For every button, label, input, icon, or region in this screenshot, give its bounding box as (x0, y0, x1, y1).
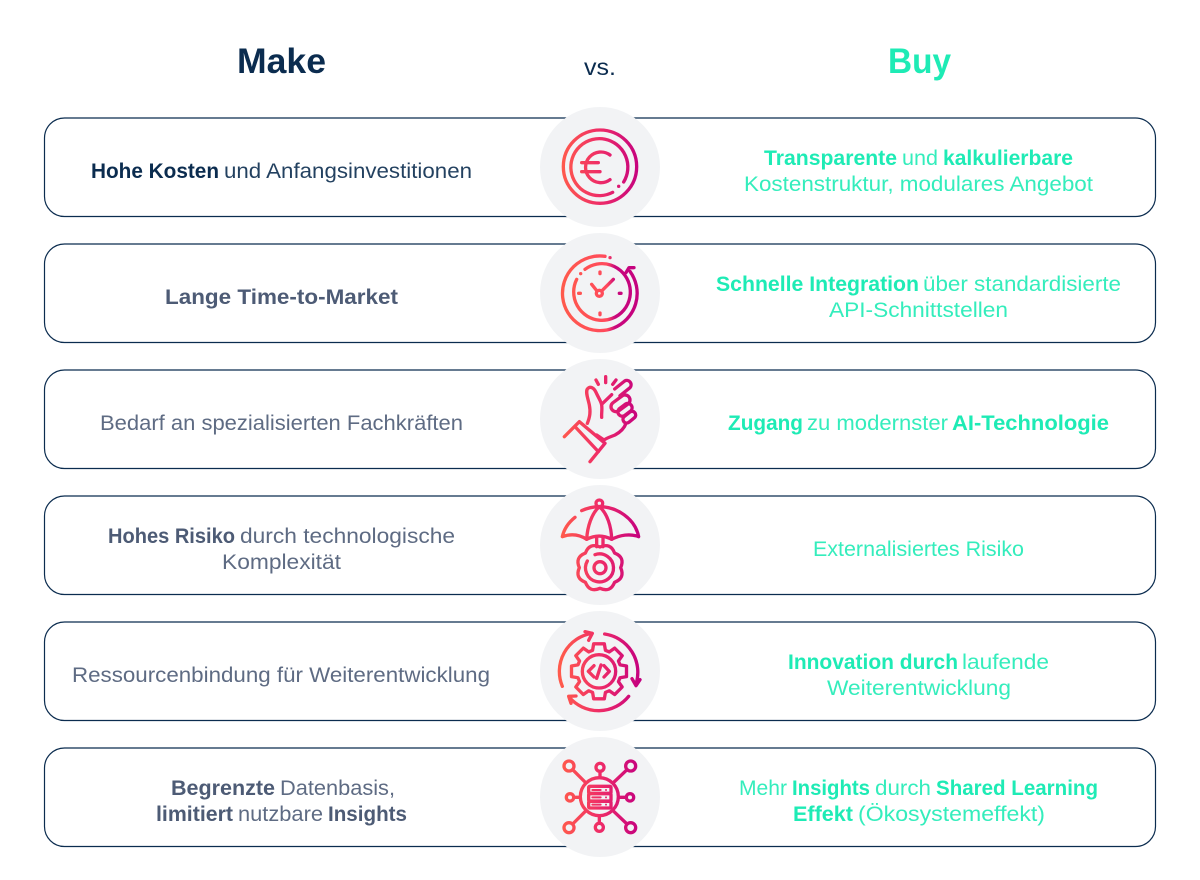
icon: euro coin (563, 130, 637, 203)
panel: row 4 box (44, 496, 1156, 594)
icon: umbrella over gear (562, 500, 639, 590)
buy text 5: Innovation durch (788, 651, 958, 674)
make text 4: durch technologische (240, 525, 455, 548)
buy text 6: Effekt (793, 803, 853, 826)
heading: Make: Make (237, 42, 326, 81)
icon disc 6 (540, 737, 660, 857)
icon disc 1 (540, 107, 660, 227)
buy text 5 (788, 651, 1049, 700)
make text 1: und Anfangsinvestitionen (224, 160, 472, 183)
icon disc 4 (540, 485, 660, 605)
buy text 1 (744, 147, 1093, 196)
icon disc 5 (540, 611, 660, 731)
buy text 6 (739, 777, 1098, 826)
make text 6: Begrenzte (171, 777, 275, 800)
buy text 6: durch (875, 777, 931, 800)
make text 6 (156, 777, 407, 826)
buy text 6: Insights (792, 777, 870, 800)
buy text 6: Shared Learning (936, 777, 1098, 800)
make text 4: Hohes Risiko (108, 525, 235, 548)
make text 6: limitiert (156, 803, 233, 826)
make text 4 (108, 525, 455, 574)
buy text 3: Zugang (728, 412, 803, 435)
icon: code gear with cycle arrows (559, 632, 640, 711)
panel: row 3 box (44, 370, 1156, 468)
buy text 2 (716, 273, 1121, 322)
buy text 4: Externalisiertes Risiko (813, 538, 1024, 561)
icon disc 3 (540, 359, 660, 479)
buy text 3: AI-Technologie (952, 412, 1109, 435)
row 6: data (44, 737, 1156, 857)
buy text 1: und (902, 147, 938, 170)
buy text 3 (728, 412, 1109, 435)
buy text 2: über standardisierte (923, 273, 1121, 296)
buy text 6: Mehr (739, 777, 787, 800)
buy text 2: Schnelle Integration (716, 273, 919, 296)
panel: row 5 box (44, 622, 1156, 720)
icon: clock with arrow (562, 256, 637, 331)
buy text 1: Kostenstruktur, modulares Angebot (744, 173, 1093, 196)
icon: snapping hand (564, 377, 636, 462)
make text 6: Insights (328, 803, 407, 826)
panel: row 6 box (44, 748, 1156, 846)
buy text 6: (Ökosystemeffekt) (858, 803, 1045, 826)
buy text 1: kalkulierbare (943, 147, 1073, 170)
make text 5: Ressourcenbindung für Weiterentwicklung (72, 664, 490, 687)
make text 6: Datenbasis, (280, 777, 395, 800)
panel: row 2 box (44, 244, 1156, 342)
icon: server network (564, 761, 636, 833)
make text 1 (91, 160, 472, 183)
row 5: development (44, 611, 1156, 731)
row 3: skills (44, 359, 1156, 479)
make text 2: Lange Time-to-Market (165, 286, 398, 309)
icon disc 2 (540, 233, 660, 353)
row 2: time to market (44, 233, 1156, 353)
row 1: costs (44, 107, 1156, 227)
buy text 1: Transparente (764, 147, 897, 170)
buy text 5: Weiterentwicklung (827, 677, 1011, 700)
make text 3: Bedarf an spezialisierten Fachkräften (100, 412, 463, 435)
panel: row 1 box (44, 118, 1156, 216)
heading: Buy: Buy (888, 42, 952, 81)
heading: vs.: vs. (584, 54, 616, 80)
make text 4: Komplexität (222, 551, 341, 574)
buy text 2: API-Schnittstellen (829, 299, 1008, 322)
buy text 3: zu modernster (807, 412, 948, 435)
buy text 5: laufende (962, 651, 1049, 674)
make text 6: nutzbare (238, 803, 323, 826)
row 4: risk (44, 485, 1156, 605)
make text 1: Hohe Kosten (91, 160, 219, 183)
